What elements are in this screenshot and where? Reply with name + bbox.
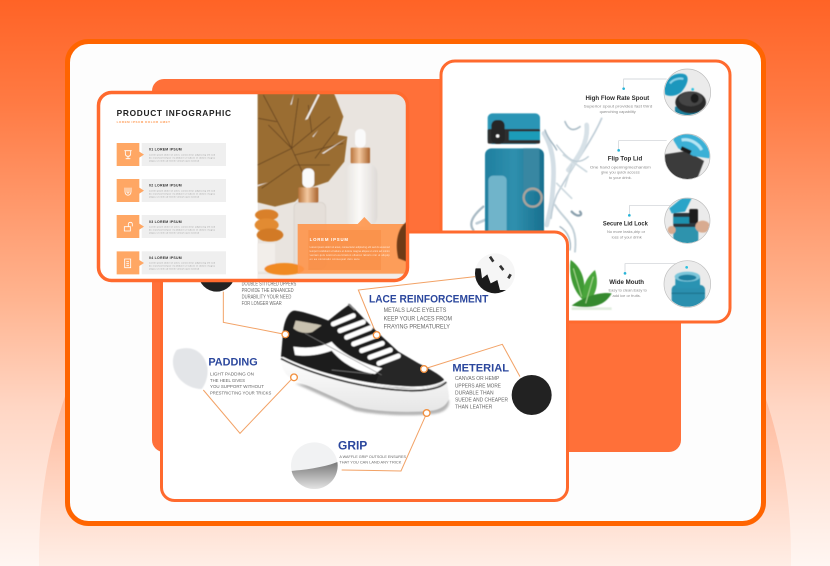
- icon: padding swatch: [173, 348, 208, 389]
- callout: material: METERIAL: [452, 363, 509, 375]
- list item 03: 03 LOREM IPSUM: [149, 220, 182, 224]
- callout: lorem ipsum overlay: LOREM IPSUM: [310, 237, 348, 242]
- list item 03: do eiusmod tempor incididunt ut labore et dolore magna: [149, 229, 216, 232]
- leader lines: [203, 277, 520, 471]
- list item 02: do eiusmod tempor incididunt ut labore et dolore magna: [149, 192, 216, 195]
- callout: padding: PRESTRICTING YOUR TRICKS: [210, 391, 272, 397]
- callout: lace reinforcement: METALS LACE EYELETS: [384, 307, 447, 314]
- list item 01: Lorem ipsum dolor sit amet, consectetur adipiscing elit sed: [149, 153, 216, 156]
- callout: grip: A WAFFLE GRIP OUTSOLE ENSURES: [339, 454, 406, 459]
- list item 03: aliqua ut enim ad minim veniam quis nostrud: [149, 232, 200, 235]
- callout: flip top lid: [590, 141, 667, 180]
- list item 02: [117, 179, 226, 202]
- list item 02: Lorem ipsum dolor sit amet, consectetur adipiscing elit sed: [149, 189, 216, 192]
- icon: stitched upper swatch: [198, 255, 235, 292]
- callout: high flow rate spout: quenching capability: [600, 109, 636, 114]
- callout: high flow rate spout: [584, 79, 667, 114]
- callout: wide mouth: [608, 263, 676, 297]
- callout: grip: THAT YOU CAN LAND ANY TRICK: [339, 459, 402, 464]
- panel: water bottle infographic: [441, 61, 730, 322]
- callout: material: CANVAS OR HEMP: [455, 376, 500, 382]
- callout: lorem ipsum overlay: tempor incididunt ut labore et dolore magna aliqua ut enim ad minim: [310, 250, 390, 253]
- subtitle: LOREM IPSUM DOLOR AMET: [117, 120, 170, 124]
- callout: flip top lid: One hand openingmechanism: [590, 164, 652, 169]
- list item 01: 01 LOREM IPSUM: [149, 148, 182, 152]
- icon: water splash: [471, 118, 602, 252]
- callout: material: DURABLE THAN: [455, 390, 494, 396]
- icon: spout detail circle: [664, 69, 711, 116]
- callout: lace reinforcement: [369, 294, 489, 331]
- outer white frame card: [68, 42, 764, 524]
- callout: lorem ipsum overlay: ex ea commodo consequat duis aute: [310, 258, 360, 261]
- list item 02: 02 LOREM IPSUM: [149, 184, 182, 188]
- callout: padding: LIGHT PADDING ON: [210, 371, 254, 377]
- callout: secure lid lock: [603, 206, 670, 239]
- icon: blue bottle: [484, 112, 545, 230]
- callout: padding: PADDING: [208, 357, 258, 369]
- list item 04: aliqua ut enim ad minim veniam quis nostrud: [149, 268, 200, 271]
- callout: wide mouth: add ice or fruits.: [612, 293, 641, 298]
- icon: material swatch: [512, 375, 552, 415]
- icon: lace swatch: [475, 253, 515, 297]
- list item 04: [117, 251, 226, 274]
- photo: leaf and bottles: [255, 92, 408, 281]
- callout: secure lid lock: Secure Lid Lock: [603, 220, 648, 227]
- text: stitched uppers: DURABILITY YOUR NEED: [242, 295, 292, 301]
- callout: secure lid lock: No more leaks,drip or: [607, 229, 646, 234]
- callout: wide mouth: Easy to clean.Easy to: [609, 288, 648, 293]
- orange backing panel: [152, 79, 681, 452]
- icon: mint leaves: [570, 260, 612, 310]
- callout: material: UPPERS ARE MORE: [455, 383, 501, 389]
- callout: lorem ipsum overlay: [298, 217, 407, 274]
- callout: high flow rate spout: High Flow Rate Spout: [585, 95, 649, 102]
- list item 01: do eiusmod tempor incididunt ut labore et dolore magna: [149, 156, 216, 159]
- callout: padding: [208, 357, 272, 397]
- callout: high flow rate spout: Superior spout provides fast third: [584, 104, 652, 109]
- text: stitched uppers: PROVIDE THE ENHANCED: [242, 288, 294, 294]
- callout: lace reinforcement: LACE REINFORCEMENT: [369, 294, 489, 306]
- icon: lock detail circle: [665, 198, 710, 245]
- panel: shoe infographic: [162, 232, 568, 500]
- icon: wide mouth detail circle: [664, 261, 711, 312]
- callout: lorem ipsum overlay: veniam quis nostrud exercitation ullamco laboris nisi ut aliquip: [310, 254, 390, 257]
- callout: grip: [338, 439, 406, 464]
- callout: padding: THE HEEL GIVES: [210, 378, 246, 384]
- icon: grip swatch: [290, 442, 338, 492]
- callout: flip top lid: give you quick access: [601, 170, 640, 175]
- callout: material: THAN LEATHER: [455, 404, 492, 410]
- list item 04: 04 LOREM IPSUM: [149, 256, 182, 260]
- text: stitched uppers: DOUBLE STITCHED UPPERS: [242, 281, 297, 287]
- callout: material: SUEDE AND CHEAPER: [455, 397, 508, 403]
- list item 01: [117, 143, 226, 166]
- callout: secure lid lock: loss of your drink: [612, 234, 642, 239]
- callout: flip top lid: Flip Top Lid: [608, 156, 642, 163]
- icon: lid detail circle: [665, 133, 710, 180]
- callout: grip: GRIP: [338, 439, 367, 453]
- callout: lace reinforcement: FRAYING PREMATURELY: [384, 324, 451, 331]
- list item 04: Lorem ipsum dolor sit amet, consectetur adipiscing elit sed: [149, 262, 216, 265]
- callout: wide mouth: Wide Mouth: [609, 279, 644, 286]
- callout: lorem ipsum overlay: Lorem ipsum dolor sit amet, consectetur adipiscing elit sed do eiusmod: [310, 246, 390, 249]
- callout: lace reinforcement: KEEP YOUR LACES FROM: [384, 315, 452, 322]
- list item 03: Lorem ipsum dolor sit amet, consectetur adipiscing elit sed: [149, 226, 216, 229]
- icon: sneaker: [281, 304, 449, 415]
- marker dots: [282, 331, 430, 416]
- list item 02: aliqua ut enim ad minim veniam quis nostrud: [149, 195, 200, 198]
- panel: product infographic slide: [98, 92, 408, 281]
- title: PRODUCT INFOGRAPHIC: [117, 108, 231, 118]
- text: stitched uppers: [242, 281, 297, 307]
- callout: material: [452, 363, 509, 410]
- callout: padding: YOU SUPPORT WITHOUT: [210, 384, 264, 390]
- text: stitched uppers: FOR LONGER WEAR: [242, 301, 282, 307]
- list item 04: do eiusmod tempor incididunt ut labore et dolore magna: [149, 265, 216, 268]
- list item 03: [117, 215, 226, 238]
- callout: flip top lid: to your drink.: [609, 175, 632, 180]
- list item 01: aliqua ut enim ad minim veniam quis nostrud: [149, 159, 200, 162]
